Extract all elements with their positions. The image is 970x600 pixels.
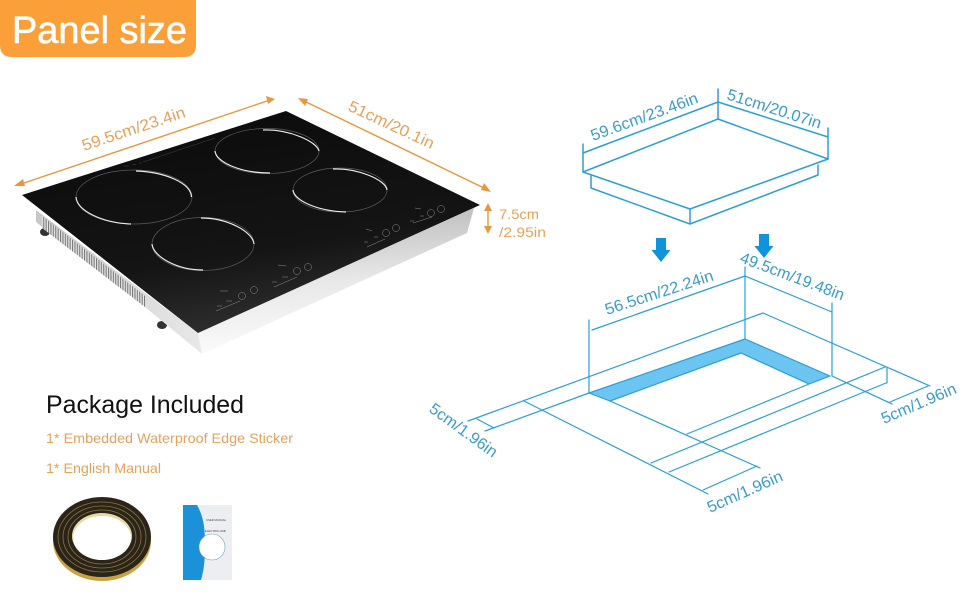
- dimension: height 7.5cm: 7.5cm: [499, 206, 539, 222]
- dimension: height 7.5cm: [484, 203, 546, 240]
- blue diagram: cutout: [468, 267, 930, 494]
- dimension: height 7.5cm: /2.95in: [499, 224, 546, 240]
- cutout lines: [468, 267, 930, 494]
- label: right margin: 5cm/1.96in: [879, 381, 959, 428]
- title: Panel size: Panel size: [12, 10, 187, 52]
- touch controls: [124, 138, 444, 311]
- burner: rear left large: [76, 170, 192, 224]
- burner: right: [293, 168, 387, 212]
- dimension: width 59.5cm: 59.5cm/23.4in: [80, 104, 188, 155]
- icon: waterproof edge sticker roll: [53, 497, 151, 581]
- induction hob product photo: [22, 111, 480, 354]
- vent fins: [42, 216, 145, 307]
- title: Panel size: [0, 0, 196, 57]
- arrow: down right: [754, 234, 774, 258]
- label: cutout depth: 49.5cm/19.48in: [738, 250, 847, 304]
- package item: manual: 1* English Manual: [46, 460, 161, 476]
- icon: user manual booklet: [183, 505, 232, 580]
- label: panel width: 59.6cm/23.46in: [589, 90, 701, 145]
- hob front side: [198, 208, 474, 354]
- package included heading: Package Included: [46, 391, 244, 419]
- dimension: depth 51cm: [298, 98, 491, 192]
- icon: user manual booklet: ELECTRIC HOB: [205, 529, 226, 533]
- icon: hob feet: [40, 228, 167, 329]
- label: bottom margin: 5cm/1.96in: [705, 468, 786, 517]
- hob left side with vents: [36, 210, 202, 354]
- label: cutout width: 56.5cm/22.24in: [603, 268, 716, 319]
- icon: user manual booklet: USER MANUAL: [206, 518, 227, 522]
- label: left margin: 5cm/1.96in: [426, 400, 500, 461]
- arrow: down left: [652, 238, 670, 262]
- glass top: [22, 111, 480, 333]
- burner: rear: [215, 128, 319, 174]
- label: panel depth: 51cm/20.07in: [725, 87, 823, 133]
- dimension: depth 51cm: 51cm/20.1in: [345, 98, 437, 153]
- burner: front: [152, 218, 254, 270]
- blue diagram: panel body: [583, 89, 828, 224]
- highlighted cutout edge band: [589, 339, 830, 401]
- package item: sticker: 1* Embedded Waterproof Edge Sticker: [46, 430, 293, 446]
- dimension: width 59.5cm: [14, 96, 275, 186]
